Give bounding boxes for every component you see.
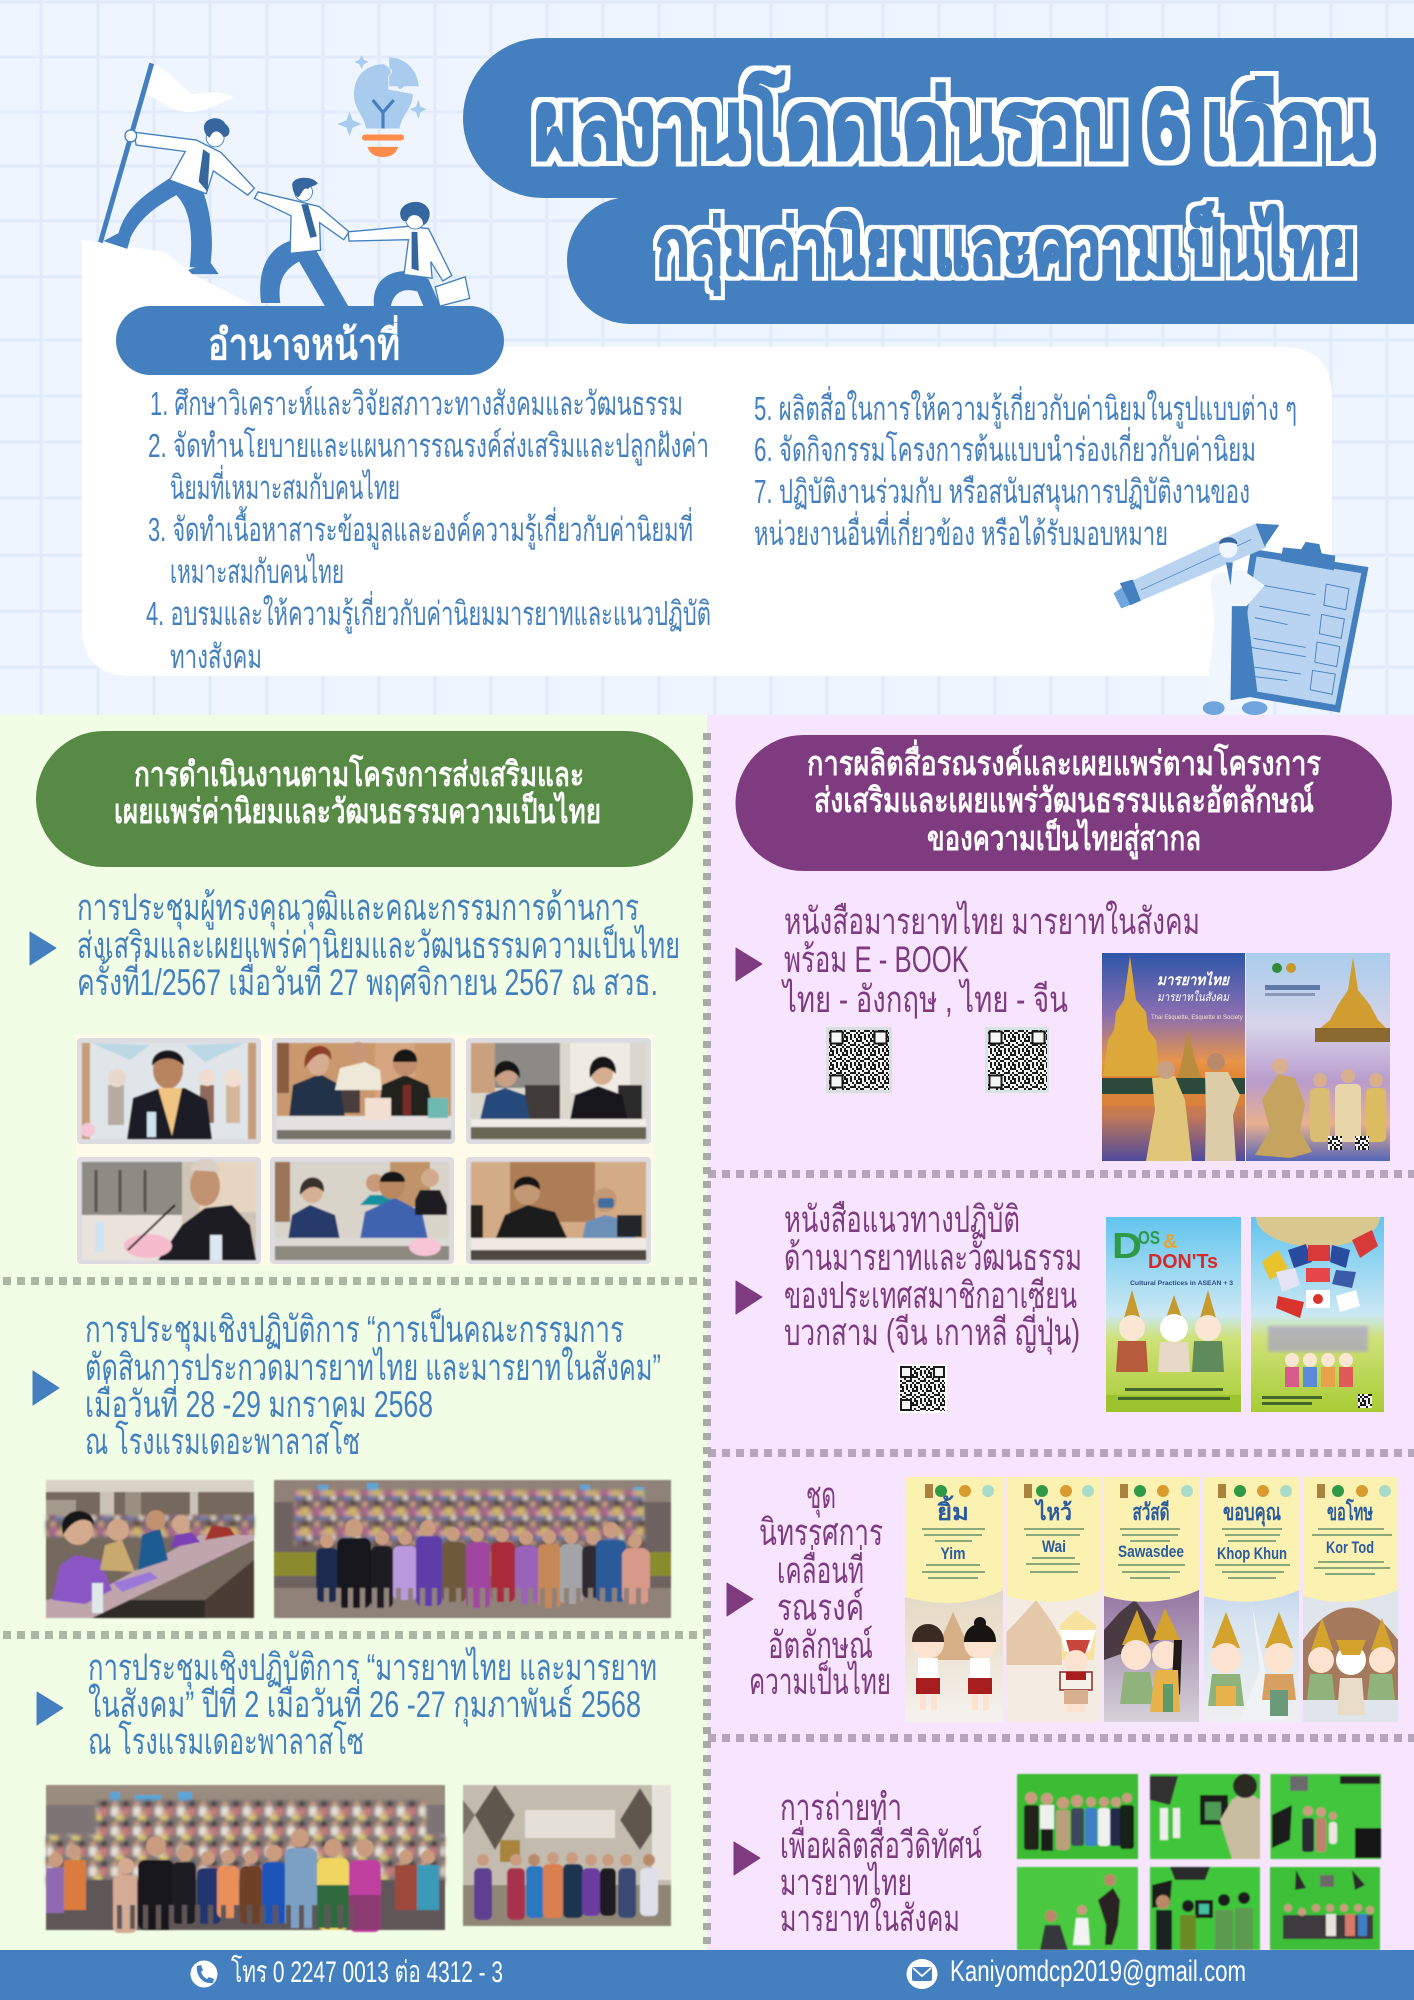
text: ASEAN guide book: [784, 1199, 1082, 1355]
photo: chairman speaking: [81, 1043, 256, 1139]
background: light blue grid: [0, 0, 1414, 720]
book cover: Dos and Don'ts: DON'Ts: [1148, 1251, 1218, 1273]
panel: right section background: [707, 715, 1414, 1955]
arrow: book item: [736, 948, 762, 981]
illustration: climbers helping each other: [100, 63, 470, 308]
arrow: video item: [734, 1842, 760, 1875]
poster: Kor Tod: [1303, 1477, 1398, 1722]
text: committee meeting: [77, 887, 680, 1003]
book cover: Thai etiquette front: Thai Etiquette, Etiquette in Society: [1151, 1015, 1243, 1021]
book cover: ASEAN flags: [1251, 1217, 1384, 1412]
photo: workshop group photo: [274, 1480, 671, 1618]
book cover: Thai etiquette front: มารยาทไทย: [1157, 971, 1230, 989]
text: mobile exhibition: อัตลักษณ์: [768, 1625, 873, 1666]
photo: delegates listening: [275, 1162, 449, 1260]
poster: Yim: ยิ้ม: [936, 1495, 969, 1525]
climber three with briefcase: [348, 202, 470, 308]
text: etiquette workshop: ณ โรงแรมเดอะพาลาสโซ: [88, 1720, 364, 1762]
book cover: Thai etiquette front: มารยาทในสังคม: [1157, 990, 1230, 1004]
QR code 2: [985, 1027, 1049, 1093]
list of duties, left column: 2. จัดทำนโยบายและแผนการรณรงค์ส่งเสริมและปลูกฝังค่า: [148, 427, 709, 466]
heading pill: duties: อำนาจหน้าที่: [208, 315, 400, 368]
contact: email address: Kaniyomdcp2019@gmail.com: [950, 1955, 1246, 1988]
title banner: pill shapes: [463, 38, 1414, 324]
text: mobile exhibition: รณรงค์: [777, 1587, 864, 1628]
white panel with mountain peak: [82, 240, 1332, 676]
person: [1203, 537, 1267, 715]
list of duties, left column: 1. ศึกษาวิเคราะห์และวิจัยสภาวะทางสังคมและวัฒนธรรม: [150, 385, 683, 422]
photo: senior adviser speaking: [82, 1159, 256, 1260]
photo: two men at table: [471, 1162, 646, 1260]
heading pill: right section: [736, 735, 1392, 871]
arrow: item 3: [37, 1692, 63, 1725]
poster: Khop Khun: Khop Khun: [1217, 1544, 1287, 1563]
poster: Yim: [905, 1477, 1003, 1722]
divider: left 1: [3, 1277, 705, 1285]
clipboard: [1228, 542, 1369, 713]
text: committee meeting: ครั้งที่1/2567 เมื่อวันที่ 27 พฤศจิกายน 2567 ณ สวธ.: [77, 955, 658, 1003]
icon: light bulb with puzzle: [337, 55, 427, 157]
flag pole: [100, 63, 152, 242]
poster: Kor Tod: ขอโทษ: [1327, 1498, 1373, 1525]
text: mobile exhibition: ความเป็นไทย: [749, 1658, 891, 1702]
climber two: [254, 178, 349, 308]
arrow: item 2: [33, 1371, 59, 1405]
text: video production: มารยาทไทย: [780, 1861, 912, 1903]
QR code 3: [898, 1364, 947, 1413]
poster: Wai: Wai: [1042, 1537, 1066, 1556]
text: video production: เพื่อผลิตสื่อวีดิทัศน์: [780, 1819, 982, 1866]
text: mobile exhibition: ชุด: [806, 1475, 836, 1518]
list of duties, left column: นิยมที่เหมาะสมกับคนไทย: [170, 465, 400, 506]
heading pill: left section: เผยแพร่ค่านิยมและวัฒนธรรมความเป็นไทย: [114, 790, 601, 831]
poster: Wai: ไหว้: [1033, 1498, 1072, 1525]
photo: etiquette workshop staff on stage: [463, 1785, 671, 1926]
photo: green-screen group: [1017, 1774, 1138, 1859]
text: ASEAN guide book: หนังสือแนวทางปฏิบัติ: [784, 1199, 1020, 1240]
list of duties, left column: 3. จัดทำเนื้อหาสาระข้อมูลและองค์ความรู้เกี่ยวกับค่านิยมที่: [148, 506, 693, 550]
text: committee meeting: ส่งเสริมและเผยแพร่ค่านิยมและวัฒนธรรมความเป็นไทย: [77, 922, 680, 966]
photo: workshop participants at tables: [46, 1480, 254, 1618]
divider: centre vertical: [703, 733, 711, 1950]
text: mobile exhibition: เคลื่อนที่: [777, 1544, 864, 1591]
heading pill: left section: [36, 731, 693, 867]
arrow: exhibition item: [727, 1583, 753, 1616]
heading pill: left section: การดำเนินงานตามโครงการส่งเสริมและ: [134, 754, 584, 794]
photo: camera crew: [1150, 1774, 1260, 1859]
heading pill: right section: ของความเป็นไทยสู่สากล: [927, 817, 1201, 860]
divider: right 3: [708, 1734, 1414, 1742]
book cover: Dos and Don'ts: OS: [1138, 1228, 1160, 1248]
text: video production: การถ่ายทำ: [780, 1787, 902, 1828]
book cover: Thai etiquette front: [1102, 953, 1245, 1161]
divider: right 1: [708, 1170, 1414, 1178]
text: etiquette book: [781, 900, 1200, 1020]
group front row: [316, 1519, 650, 1612]
poster: Kor Tod: Kor Tod: [1326, 1538, 1374, 1557]
text: ASEAN guide book: ของประเทศสมาชิกอาเซียน: [784, 1275, 1077, 1316]
photo grid: committee meeting: [76, 1035, 653, 1265]
panel: left section background: [0, 715, 707, 1955]
poster: Wai: [1006, 1477, 1102, 1722]
illustration: person with pencil and clipboard: [1114, 523, 1369, 715]
text: etiquette book: พร้อม E - BOOK: [784, 939, 969, 980]
arrow: ASEAN book item: [736, 1281, 762, 1314]
footer bar: [0, 1950, 1414, 2000]
text: etiquette workshop: การประชุมเชิงปฏิบัติการ “มารยาทไทย และมารยาท: [88, 1646, 657, 1690]
text: judges workshop: การประชุมเชิงปฏิบัติการ “การเป็นคณะกรรมการ: [85, 1306, 624, 1352]
pencil: [1114, 523, 1279, 608]
text: video production: มารยาทในสังคม: [780, 1897, 960, 1939]
poster: Yim: Yim: [940, 1544, 966, 1563]
group front row: [46, 1829, 439, 1933]
divider: right 2: [708, 1449, 1414, 1457]
photo: filming crew: [1150, 1867, 1260, 1950]
text: mobile exhibition: [749, 1475, 891, 1702]
icon: envelope: [906, 1959, 938, 1989]
list of duties, right column: หน่วยงานอื่นที่เกี่ยวข้อง หรือได้รับมอบหมาย: [754, 511, 1168, 552]
photo: studio team: [1270, 1867, 1380, 1950]
poster: Sawasdee: Sawasdee: [1118, 1542, 1184, 1561]
photo: women taking notes: [471, 1043, 646, 1139]
text: etiquette workshop: ในสังคม” ปีที่ 2 เมื่อวันที่ 26 -27 กุมภาพันธ์ 2568: [88, 1678, 641, 1727]
arrow: item 1: [30, 932, 56, 965]
poster: Sawasdee: สวัสดี: [1132, 1499, 1170, 1525]
divider: left 2: [3, 1631, 705, 1639]
text: judges workshop: [85, 1306, 661, 1462]
book cover: Thai etiquette back: [1246, 953, 1390, 1161]
climber one: [104, 118, 254, 274]
flag: [146, 64, 233, 112]
text: video production: [780, 1787, 982, 1939]
text: judges workshop: ณ โรงแรมเดอะพาลาสโซ: [85, 1420, 360, 1462]
text: ASEAN guide book: บวกสาม (จีน เกาหลี ญี่ปุ่น): [784, 1306, 1080, 1355]
poster: Sawasdee: [1104, 1477, 1199, 1722]
text: etiquette workshop: [88, 1646, 657, 1762]
poster: Khop Khun: [1204, 1477, 1299, 1722]
photo: kneeling scene: [1017, 1867, 1138, 1950]
list of duties, left column: ทางสังคม: [170, 638, 262, 675]
heading pill: duties: [116, 306, 504, 375]
icon: telephone: [190, 1960, 218, 1988]
poster: Khop Khun: ขอบคุณ: [1223, 1499, 1281, 1527]
list of duties, left column: 4. อบรมและให้ความรู้เกี่ยวกับค่านิยมมารยาทและแนวปฏิบัติ: [146, 591, 711, 634]
text: etiquette book: หนังสือมารยาทไทย มารยาทในสังคม: [784, 900, 1200, 942]
text: committee meeting: การประชุมผู้ทรงคุณวุฒิและคณะกรรมการด้านการ: [77, 887, 639, 930]
book cover: Dos and Don'ts: D: [1112, 1225, 1142, 1266]
text: judges workshop: ตัดสินการประกวดมารยาทไทย และมารยาทในสังคม”: [85, 1346, 661, 1388]
photo: members at table: [277, 1042, 451, 1139]
photo: etiquette workshop group: [46, 1785, 445, 1933]
text: etiquette book: ไทย - อังกฤษ , ไทย - จีน: [781, 978, 1068, 1020]
book cover: Dos and Don'ts: Cultural Practices in ASEAN + 3: [1130, 1280, 1233, 1287]
text: ASEAN guide book: ด้านมารยาทและวัฒนธรรม: [784, 1237, 1082, 1278]
book cover: Dos and Don'ts: &: [1163, 1231, 1177, 1253]
contact: telephone number: โทร 0 2247 0013 ต่อ 4312 - 3: [231, 1954, 503, 1989]
QR code 1: [826, 1027, 892, 1093]
text: judges workshop: เมื่อวันที่ 28 -29 มกราคม 2568: [85, 1378, 433, 1425]
list of duties, left column: [146, 385, 711, 675]
list of duties, left column: เหมาะสมกับคนไทย: [170, 553, 344, 590]
list of duties, right column: [754, 386, 1297, 552]
book cover: Dos and Don'ts: [1106, 1217, 1241, 1412]
photo: studio with lights: [1270, 1774, 1381, 1859]
text: mobile exhibition: นิทรรศการ: [759, 1512, 883, 1553]
